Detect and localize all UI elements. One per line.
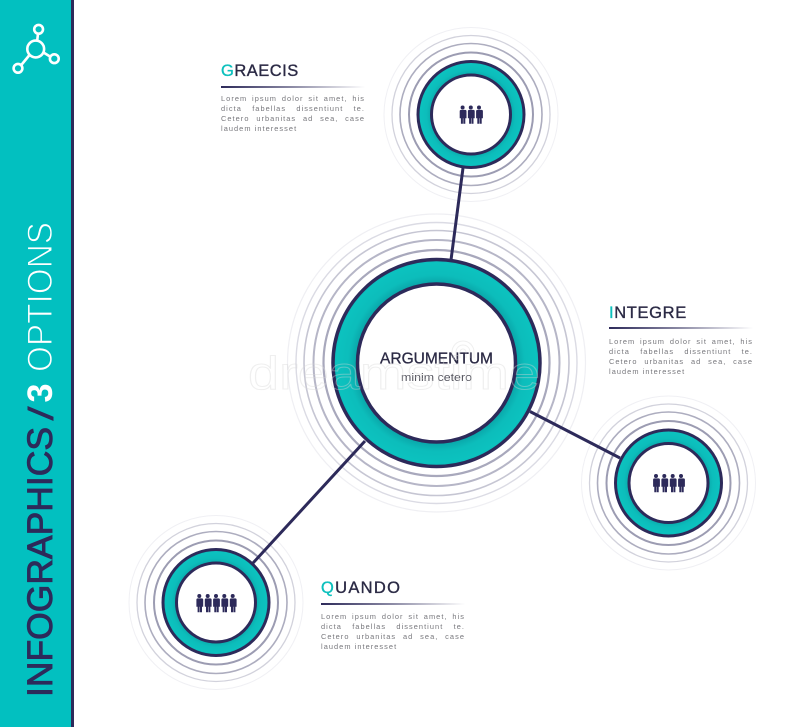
center title: ARGUMENTUM [380, 350, 493, 368]
node: argumentum [288, 214, 586, 512]
text block: graecis: laudem interesset [221, 124, 297, 133]
node: quando [129, 516, 303, 690]
icon: five people [196, 594, 237, 612]
text block: integre: Cetero urbanitas ad sea, case [609, 357, 753, 366]
watermark: dreamstime [248, 347, 540, 399]
divider [221, 86, 365, 88]
text block: quando [321, 612, 465, 651]
text block: graecis: Lorem ipsum dolor sit amet, his [221, 94, 365, 103]
text block: quando: Lorem ipsum dolor sit amet, his [321, 612, 465, 621]
icon: three people [460, 106, 483, 124]
text block: graecis [221, 94, 365, 133]
sidebar title: / [22, 406, 61, 421]
panel: integre text [609, 304, 753, 376]
center subtitle: minim cetero [401, 372, 472, 384]
sidebar title: OPTIONS [21, 222, 60, 372]
heading: graecis: GRAECIS [221, 62, 299, 80]
text block: integre: dicta fabellas dissentiunt te. [609, 347, 753, 356]
text block: quando: laudem interesset [321, 642, 397, 651]
teal ring [333, 260, 540, 466]
icon: four people [653, 474, 685, 492]
text block: graecis: Cetero urbanitas ad sea, case [221, 114, 365, 123]
sidebar [0, 0, 74, 727]
text block: integre: laudem interesset [609, 367, 685, 376]
divider [321, 603, 465, 605]
sidebar title: 3 [21, 384, 60, 402]
sidebar title [21, 222, 61, 697]
text block: graecis: dicta fabellas dissentiunt te. [221, 104, 365, 113]
center disc [358, 284, 516, 442]
panel: graecis text [221, 62, 365, 133]
text block: quando: Cetero urbanitas ad sea, case [321, 632, 465, 641]
node: graecis [384, 28, 558, 202]
text block: integre [609, 337, 753, 376]
connector lines [253, 168, 620, 563]
concentric rings [288, 214, 586, 512]
text block: integre: Lorem ipsum dolor sit amet, his [609, 337, 753, 346]
sidebar title: INFOGRAPHICS [21, 427, 60, 697]
divider [609, 327, 753, 329]
text block: quando: dicta fabellas dissentiunt te. [321, 622, 465, 631]
node: integre [582, 396, 756, 570]
heading: integre: INTEGRE [609, 304, 687, 322]
icon: network nodes [14, 25, 59, 73]
heading: quando: QUANDO [321, 579, 401, 597]
panel: quando text [321, 579, 465, 651]
